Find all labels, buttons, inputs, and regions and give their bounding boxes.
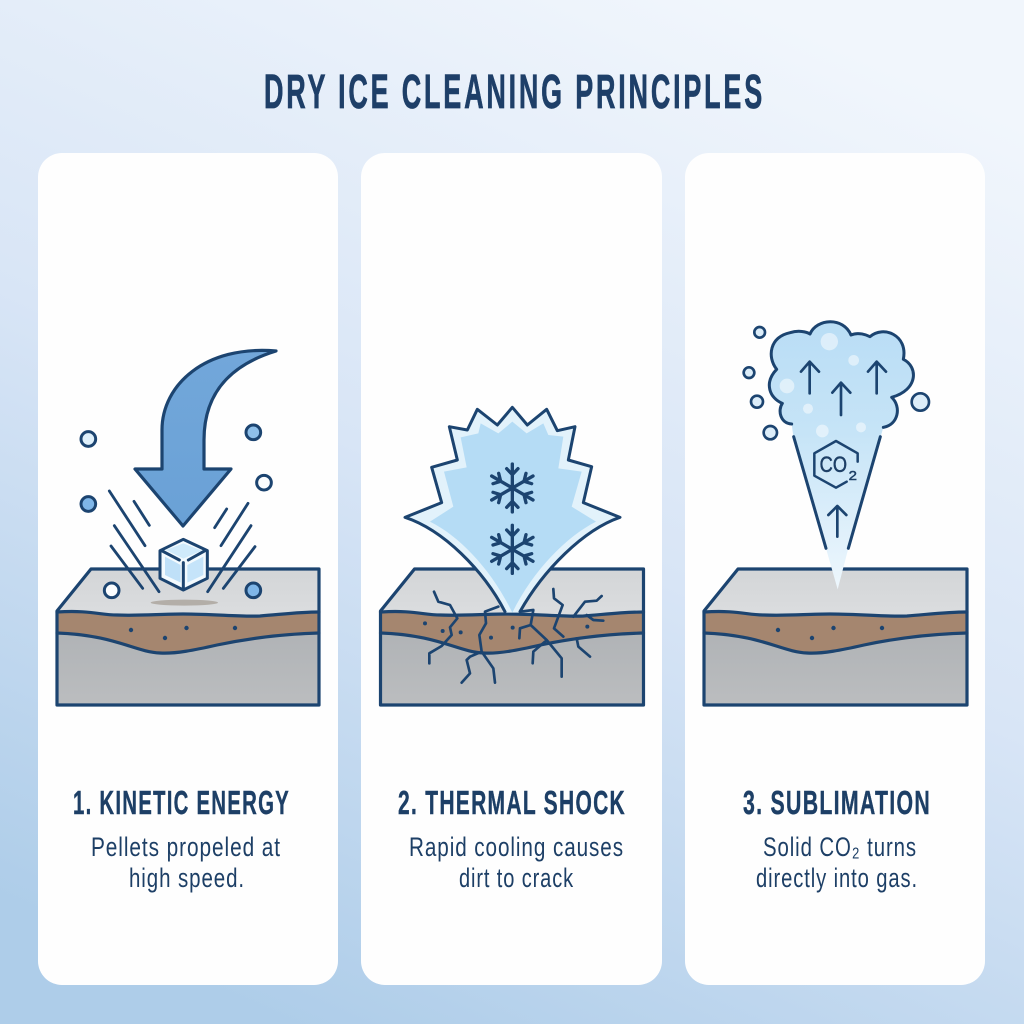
layered surface block — [57, 569, 319, 705]
heading: 2. THERMAL SHOCK — [398, 784, 626, 821]
description — [756, 832, 918, 893]
cone outline — [794, 437, 880, 548]
description: Pellets propeled at — [91, 832, 281, 862]
card background — [361, 153, 662, 985]
layered surface block — [380, 569, 644, 705]
icon: CO2 hexagon — [814, 441, 858, 488]
description — [409, 832, 624, 893]
card background — [38, 153, 338, 985]
icon: CO2 hexagon: 2 — [849, 468, 857, 483]
icon: downward curved arrow — [135, 350, 276, 526]
dry ice pellets — [81, 425, 271, 598]
panel: kinetic energy — [38, 153, 338, 985]
icon: ice cube — [160, 539, 207, 590]
speed lines — [109, 491, 255, 592]
icon: snowflake — [492, 525, 533, 573]
layered surface block — [704, 569, 967, 705]
gas cloud and cone — [744, 322, 929, 589]
cloud and cone fill — [769, 322, 913, 589]
rising arrows — [801, 362, 886, 537]
description: Rapid cooling causes — [409, 832, 624, 862]
description — [91, 832, 281, 893]
card background — [685, 153, 985, 985]
icon: snowflake — [492, 464, 533, 512]
cracks in dirt layer — [423, 589, 603, 683]
icon: CO2 hexagon: CO — [820, 452, 847, 477]
impact shadow — [151, 600, 218, 606]
description: high speed. — [129, 863, 245, 893]
highlights — [780, 333, 866, 437]
panel: sublimation — [685, 153, 985, 985]
description: directly into gas. — [756, 863, 918, 893]
gas bubbles — [744, 327, 929, 439]
cloud outline — [769, 322, 913, 427]
description: Solid CO₂ turns — [763, 832, 917, 862]
impact illustration — [81, 425, 271, 606]
description: dirt to crack — [459, 863, 574, 893]
panel: thermal shock — [361, 153, 662, 985]
cold burst — [405, 407, 620, 613]
heading: 1. KINETIC ENERGY — [73, 784, 290, 821]
